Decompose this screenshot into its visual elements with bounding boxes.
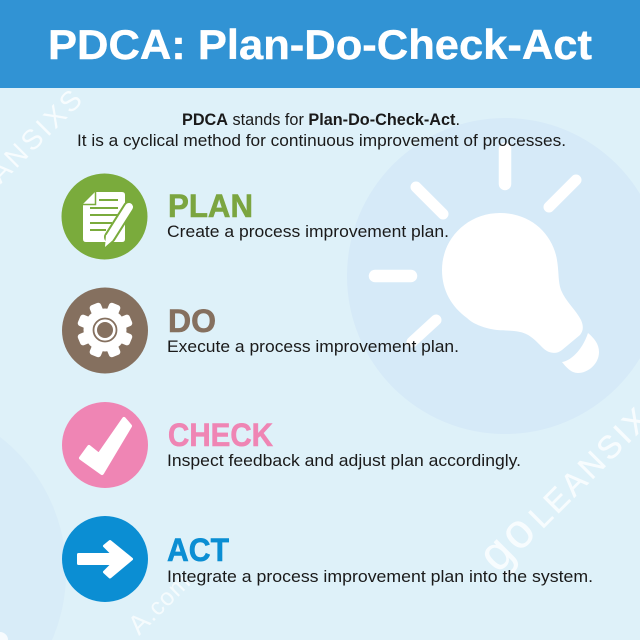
background circle: bottom left	[0, 437, 66, 640]
act circle	[62, 516, 148, 602]
act heading: ACT	[167, 532, 229, 568]
watermark: corner fragment	[0, 632, 8, 640]
step: check	[62, 402, 521, 488]
intro line 1: PDCA stands for Plan-Do-Check-Act.	[182, 111, 460, 129]
act description: Integrate a process improvement plan into the system.	[167, 568, 593, 586]
step: act	[62, 516, 593, 602]
icon: arrow	[78, 542, 132, 577]
plan circle	[62, 174, 148, 260]
icon: check mark	[81, 419, 130, 473]
step: plan	[62, 174, 449, 260]
plan heading: PLAN	[168, 188, 253, 224]
bulb body	[442, 213, 583, 353]
background circle: behind bulb	[347, 118, 640, 434]
do circle	[62, 288, 148, 374]
step: do	[62, 288, 459, 374]
bulb base	[562, 333, 599, 373]
title: PDCA: Plan-Do-Check-Act	[48, 21, 592, 68]
plan description: Create a process improvement plan.	[167, 223, 449, 241]
header band	[0, 0, 640, 88]
check description: Inspect feedback and adjust plan accordingly.	[167, 452, 521, 470]
check heading: CHECK	[168, 417, 273, 453]
do description: Execute a process improvement plan.	[167, 338, 459, 356]
bulb rays	[375, 149, 576, 342]
check circle	[62, 402, 148, 488]
do heading: DO	[168, 303, 216, 339]
intro text	[77, 111, 566, 150]
icon: gear	[68, 293, 142, 367]
icon: document and pencil	[83, 192, 129, 247]
icon: light bulb with rays	[375, 149, 599, 373]
intro line 2: It is a cyclical method for continuous improvement of processes.	[77, 132, 566, 150]
watermark: bottom: A.com	[122, 566, 196, 640]
